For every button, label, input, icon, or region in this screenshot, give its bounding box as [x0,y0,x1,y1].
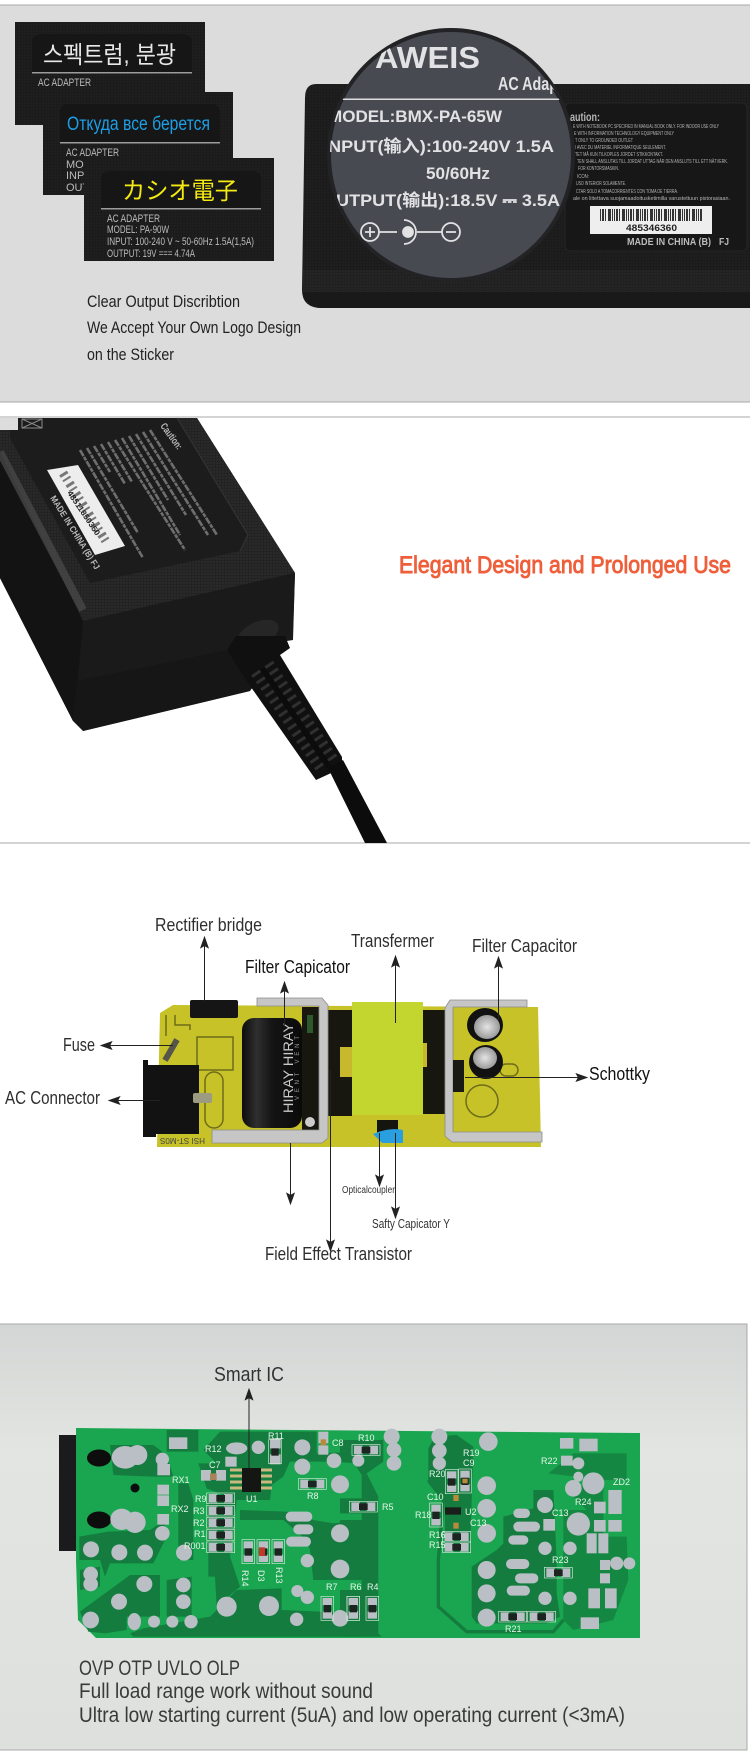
component silk labels: R16 [429,1530,446,1540]
circuit board bottom [59,1428,640,1638]
rectifier bridge part [190,1000,238,1018]
component labels: Filter Capacitor [472,936,577,956]
component silk labels: R7 [326,1582,338,1592]
component silk labels: R24 [575,1497,592,1507]
text: sticker description: We Accept Your Own Logo Design [87,318,301,337]
rotated barcode [47,465,125,555]
component silk labels: C9 [463,1458,475,1468]
fuse [162,1038,180,1062]
caution text: FOR KONTORSMASKIN. [578,166,619,172]
magnifier circle: 50/60Hz [426,164,490,183]
component silk labels: R2 [193,1518,205,1528]
AC connector [143,1060,212,1137]
sticker: Russian logo: MOD [66,159,92,171]
component silk labels: C13 [470,1518,487,1528]
component silk labels: D3 [256,1570,266,1582]
component silk labels: RX2 [171,1504,189,1514]
text: feature list: Full load range work without sound [79,1680,373,1703]
adapter photo: FJ [719,237,729,248]
caution text: T ONLY TO GROUNDED OUTLET [575,138,633,144]
component silk labels: R9 [195,1494,207,1504]
component silk labels: R11 [268,1431,284,1441]
copper traces left half [79,1430,360,1637]
SMD parts left half [207,1439,360,1620]
SMD parts right half [347,1445,572,1622]
board silk lines [166,1015,518,1128]
arrows [101,937,587,1251]
component labels: Opticalcoupler [342,1185,396,1196]
cable strain relief [227,614,387,843]
component silk labels: R5 [382,1502,394,1512]
caution text: USO INTERIOR SOLAMENTE. [576,181,626,187]
component silk labels: RX1 [172,1475,190,1485]
magnifier circle: AWEIS [375,40,480,75]
sticker: Japanese logo: カシオ電子 [122,178,238,205]
arrow: smart IC [248,1389,250,1468]
panel: PCB top view [5,915,650,1264]
barcode [590,206,712,234]
magnifier circle: OUTPUT(输出):18.5V ⎓ 3.5A [322,190,560,210]
smart IC chip [230,1468,272,1492]
component silk labels: R23 [552,1555,569,1565]
component labels: Rectifier bridge [155,915,262,935]
caution text: aution: [570,110,600,124]
component silk labels: R20 [429,1469,446,1479]
text: feature list [79,1657,625,1727]
adapter photo: MADE IN CHINA (B) [627,237,711,248]
large capacitor: VENT VENT [295,1036,301,1100]
caution text: I AVEC DU MATERIEL INFORMATIQUE SEULEMENT. [575,145,666,151]
component silk labels: R8 [307,1491,319,1501]
right heat sink [445,1000,542,1142]
text: sticker description: on the Sticker [87,345,174,364]
component labels [5,915,650,1264]
magnifier circle: INPUT(输入):100-240V 1.5A [323,136,554,156]
circuit board top [143,998,542,1147]
schottky part [453,1060,464,1092]
sticker: Japanese logo [84,158,274,261]
solder pads right half [352,1429,635,1629]
text: sticker description [87,292,301,364]
sticker: Russian logo: Откуда все берется [67,114,210,135]
component silk labels: C8 [332,1438,344,1448]
component silk labels: R14 [240,1570,250,1587]
sticker: Japanese logo: AC ADAPTER [107,213,160,225]
magnifier circle: MODEL:BMX-PA-65W [328,107,503,126]
adapter photo [0,418,387,843]
component labels: Schottky [589,1064,650,1084]
component silk labels: R12 [205,1444,222,1454]
text: feature list: Ultra low starting current (5uA) and low operating current (<3mA) [79,1704,625,1727]
barcode: 485346360 [626,223,677,234]
circuit board top: HSI ST-M0S [160,1136,205,1145]
component silk labels: R3 [193,1506,205,1516]
label on top of adapter: Caution: [158,421,184,452]
component silk labels: R4 [367,1582,379,1592]
component labels: Field Effect Transistor [265,1244,412,1264]
sticker: Japanese logo: INPUT: 100-240 V ~ 50-60Hz 1.5A(1,5A) [107,236,254,248]
sticker: Russian logo: AC ADAPTER [66,147,119,159]
mounting holes [87,1450,140,1528]
component silk labels: C13 [552,1508,569,1518]
caution text: ale on liitettava suojamaadoitusketimilla varustettuun pistorasiaan. [573,196,730,202]
panel: custom logo sticker [0,5,750,402]
magnifier circle: AC Adap [498,74,558,94]
component labels: Safty Capicator Y [372,1216,450,1231]
component silk labels [171,1431,630,1634]
component silk labels: C7 [209,1460,221,1470]
caution text [570,110,730,202]
component silk labels: U1 [246,1494,258,1504]
label on top of adapter: MADE IN CHINA (B) FJ [48,494,102,571]
caution lines [80,430,217,558]
sticker: Russian logo: INPU [66,170,92,182]
logo mark [0,418,42,430]
component silk labels: R1 [194,1529,206,1539]
component labels: AC Connector [5,1088,100,1108]
component labels: Filter Capicator [245,957,350,977]
component silk labels: ZD2 [613,1477,630,1487]
text: sticker description: Clear Output Discribtion [87,292,240,311]
large capacitor [242,1018,302,1128]
caution text: ICON: [577,174,589,180]
copper traces right half [340,1435,628,1637]
caution text: CTAR SOLO A TOMACORRIENTES CON TOMA DE TIERRA. [576,189,678,195]
large capacitor: HIRAY HIRAY [280,1022,296,1113]
label on top of adapter [47,421,217,571]
component silk labels: R19 [463,1448,480,1458]
text: feature list: OVP OTP UVLO OLP [79,1657,240,1680]
component labels: Transfermer [351,931,434,951]
caution text: TET MÅ KUN TILKOPLES JORDET STIKKONTAKT. [575,151,663,158]
left heat sink [212,998,328,1143]
solder pads left half [82,1432,349,1630]
adapter photo [302,84,750,308]
component silk labels: R15 [429,1540,446,1550]
polarity symbol [361,220,460,244]
output capacitors [467,1008,503,1079]
sticker: Korean logo: 스펙트럼, 분광 [43,42,176,69]
component silk labels: R10 [358,1433,375,1443]
caution text: E WITH INFORMATION TECHNOLOGY EQUIPMENT ONLY [574,131,674,137]
component silk labels: R22 [541,1456,558,1466]
transformer [352,1002,423,1115]
label: smart IC: Smart IC [214,1364,284,1386]
magnifier circle [322,30,573,280]
sticker: Russian logo: OUT [66,182,90,194]
component silk labels: R001 [184,1541,206,1551]
sticker: Korean logo: AC ADAPTER [38,77,91,89]
sticker: Japanese logo: OUTPUT: 19V === 4.74A [107,248,195,260]
panel: elegant design [0,417,750,843]
component silk labels: U2 [465,1507,477,1517]
sticker: Russian logo [43,92,233,195]
component silk labels: R21 [505,1624,522,1634]
component silk labels: R18 [415,1510,432,1520]
component silk labels: R6 [350,1582,362,1592]
component labels: Fuse [63,1035,95,1055]
sticker: Korean logo [15,22,205,125]
rotated barcode: 48511850350 [65,489,102,538]
optocoupler and safety capacitor [373,1120,403,1143]
component silk labels: C10 [427,1492,444,1502]
panel: PCB bottom view [0,1324,747,1750]
component silk labels: R13 [274,1567,284,1584]
sticker: Japanese logo: MODEL: PA-90W [107,224,169,236]
